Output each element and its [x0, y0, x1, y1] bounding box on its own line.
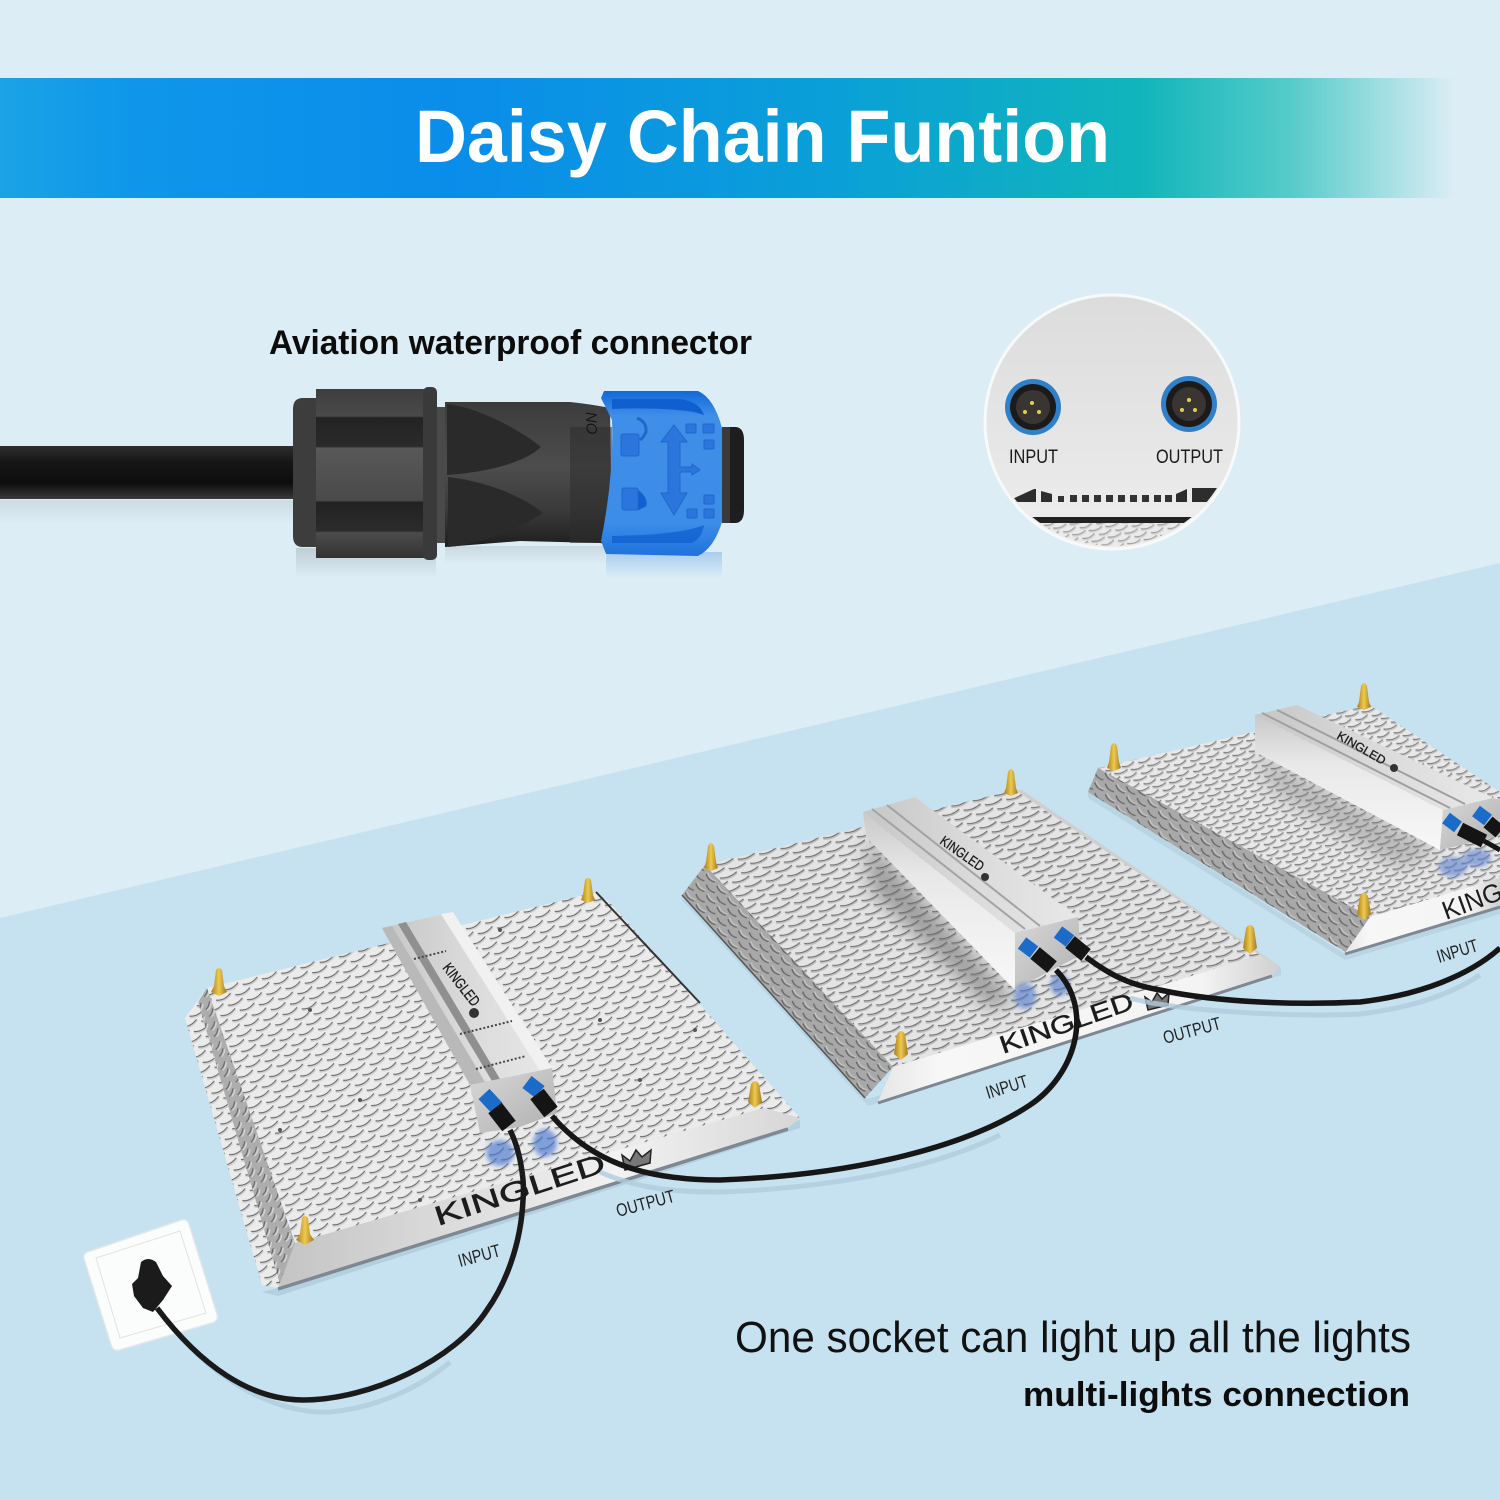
left wall [185, 988, 295, 1288]
vent slots and lower edge [1014, 488, 1217, 546]
caption: one socket: One socket can light up all the lights [735, 1313, 1411, 1362]
pins [704, 769, 1257, 1060]
cable from socket to first light input [157, 1130, 523, 1400]
screws on reflector [278, 928, 697, 1202]
ring embossed symbols [621, 418, 714, 518]
driver logo: KINGLED [1334, 728, 1389, 768]
driver cast shadow [866, 838, 1015, 1010]
crown [1145, 993, 1169, 1010]
blue locking ring [601, 391, 722, 556]
right flange [1015, 790, 1281, 967]
panel 1 input label: INPUT [456, 1240, 503, 1271]
neck [437, 407, 447, 543]
connector reflection [0, 500, 722, 578]
connectors and plugs [1022, 932, 1086, 967]
driver box [863, 797, 1081, 990]
wall socket [84, 1220, 217, 1350]
hex nut [316, 389, 424, 558]
inset disc [985, 295, 1239, 549]
reflector surface [705, 790, 1260, 1067]
blue reflections [1439, 849, 1491, 877]
panel 1: first light [185, 878, 800, 1296]
front strip [278, 1108, 800, 1288]
driver logo: KINGLED [937, 832, 987, 874]
panel 2 input label: INPUT [983, 1071, 1030, 1103]
panel shadow [682, 895, 1281, 1106]
blue reflections [1014, 974, 1070, 1009]
strip logo: KINGLED [996, 988, 1137, 1060]
inset: input and output ports [985, 295, 1239, 553]
brand mark on body: NO [582, 412, 600, 435]
reflector surface [207, 892, 764, 1243]
pins [1107, 683, 1371, 920]
panel 1 output label: OUTPUT [614, 1186, 677, 1221]
plug [132, 1259, 172, 1312]
driver logo: KINGLED [439, 960, 483, 1010]
cable from first output to second input [552, 970, 1077, 1180]
panel 2 output label: OUTPUT [1161, 1013, 1223, 1048]
cable from second output to third input [1086, 948, 1500, 1003]
strip logo: KINGLED [431, 1148, 609, 1232]
connector body [445, 402, 612, 547]
panel shadow [262, 1120, 800, 1296]
left wall [1088, 768, 1370, 953]
driver cast shadow [1255, 752, 1440, 870]
input label: INPUT [1009, 447, 1058, 468]
cable ends [1484, 841, 1500, 850]
output label: OUTPUT [1156, 447, 1223, 468]
nut flange [423, 387, 437, 560]
front strip [1345, 878, 1500, 953]
panel 3 input label: INPUT [1434, 935, 1480, 967]
title banner [0, 78, 1500, 198]
blue reflections [486, 1129, 557, 1166]
connector heading: Aviation waterproof connector [269, 324, 752, 362]
input port [1005, 379, 1061, 435]
title banner: Daisy Chain Funtion [415, 95, 1110, 178]
output port [1161, 376, 1217, 432]
cable reflections [195, 975, 1480, 1412]
crown [622, 1150, 651, 1170]
left wall [682, 865, 893, 1098]
panel 3: third light [1088, 683, 1500, 960]
pins [211, 878, 762, 1245]
front strip [878, 955, 1281, 1102]
driver box [1255, 705, 1500, 850]
cable [0, 446, 296, 499]
panel shadow [1088, 792, 1500, 960]
caption: multi-lights connection: multi-lights connection [1023, 1376, 1410, 1414]
right flange [596, 892, 800, 1118]
reflector surface [1098, 705, 1500, 922]
connectors and plugs [484, 1082, 551, 1126]
aviation waterproof connector photo [0, 387, 744, 578]
body grip shapes [447, 404, 543, 547]
front nose [722, 427, 744, 523]
rear collar [293, 398, 320, 547]
driver box [382, 912, 557, 1133]
connectors and plugs [1446, 811, 1500, 841]
panel 2: second light [682, 769, 1281, 1106]
